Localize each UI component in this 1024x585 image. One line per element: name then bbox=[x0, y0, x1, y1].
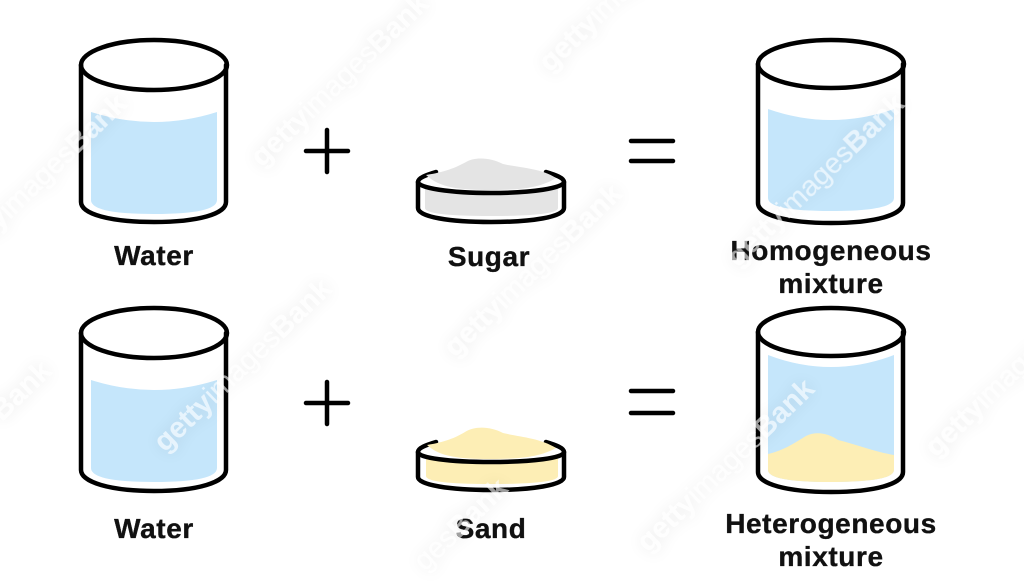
label: heterogeneous mixture bbox=[725, 508, 937, 572]
watermarks: gettyimagesBank bbox=[721, 87, 912, 273]
beaker: homogeneous mixture bbox=[758, 40, 904, 223]
dish: sugar bbox=[418, 158, 564, 222]
plus sign, bottom row bbox=[306, 382, 348, 424]
label: sugar: Sugar bbox=[448, 241, 530, 272]
beaker: water, top row bbox=[81, 40, 227, 222]
watermarks: gettyimagesBank bbox=[631, 372, 822, 558]
equals sign, top row bbox=[631, 141, 673, 161]
label: water, top row: Water bbox=[114, 240, 194, 271]
label: homogeneous mixture: mixture bbox=[778, 268, 884, 299]
label: homogeneous mixture bbox=[730, 235, 932, 299]
equals sign, bottom row bbox=[631, 391, 673, 413]
label: sand: Sand bbox=[456, 513, 526, 544]
label: heterogeneous mixture: Heterogeneous bbox=[725, 508, 937, 539]
plus sign, top row bbox=[306, 130, 348, 172]
label: heterogeneous mixture: mixture bbox=[778, 541, 884, 572]
label: water, bottom row: Water bbox=[114, 513, 194, 544]
watermarks: gesBank bbox=[408, 472, 515, 577]
watermarks: gettyimagesBank bbox=[438, 177, 629, 363]
watermarks: gettyimagesBank bbox=[148, 272, 339, 458]
dish: sand bbox=[418, 428, 564, 490]
beaker: water, bottom row bbox=[81, 308, 227, 491]
label: homogeneous mixture: Homogeneous bbox=[730, 235, 932, 266]
beaker: heterogeneous mixture bbox=[758, 308, 904, 492]
